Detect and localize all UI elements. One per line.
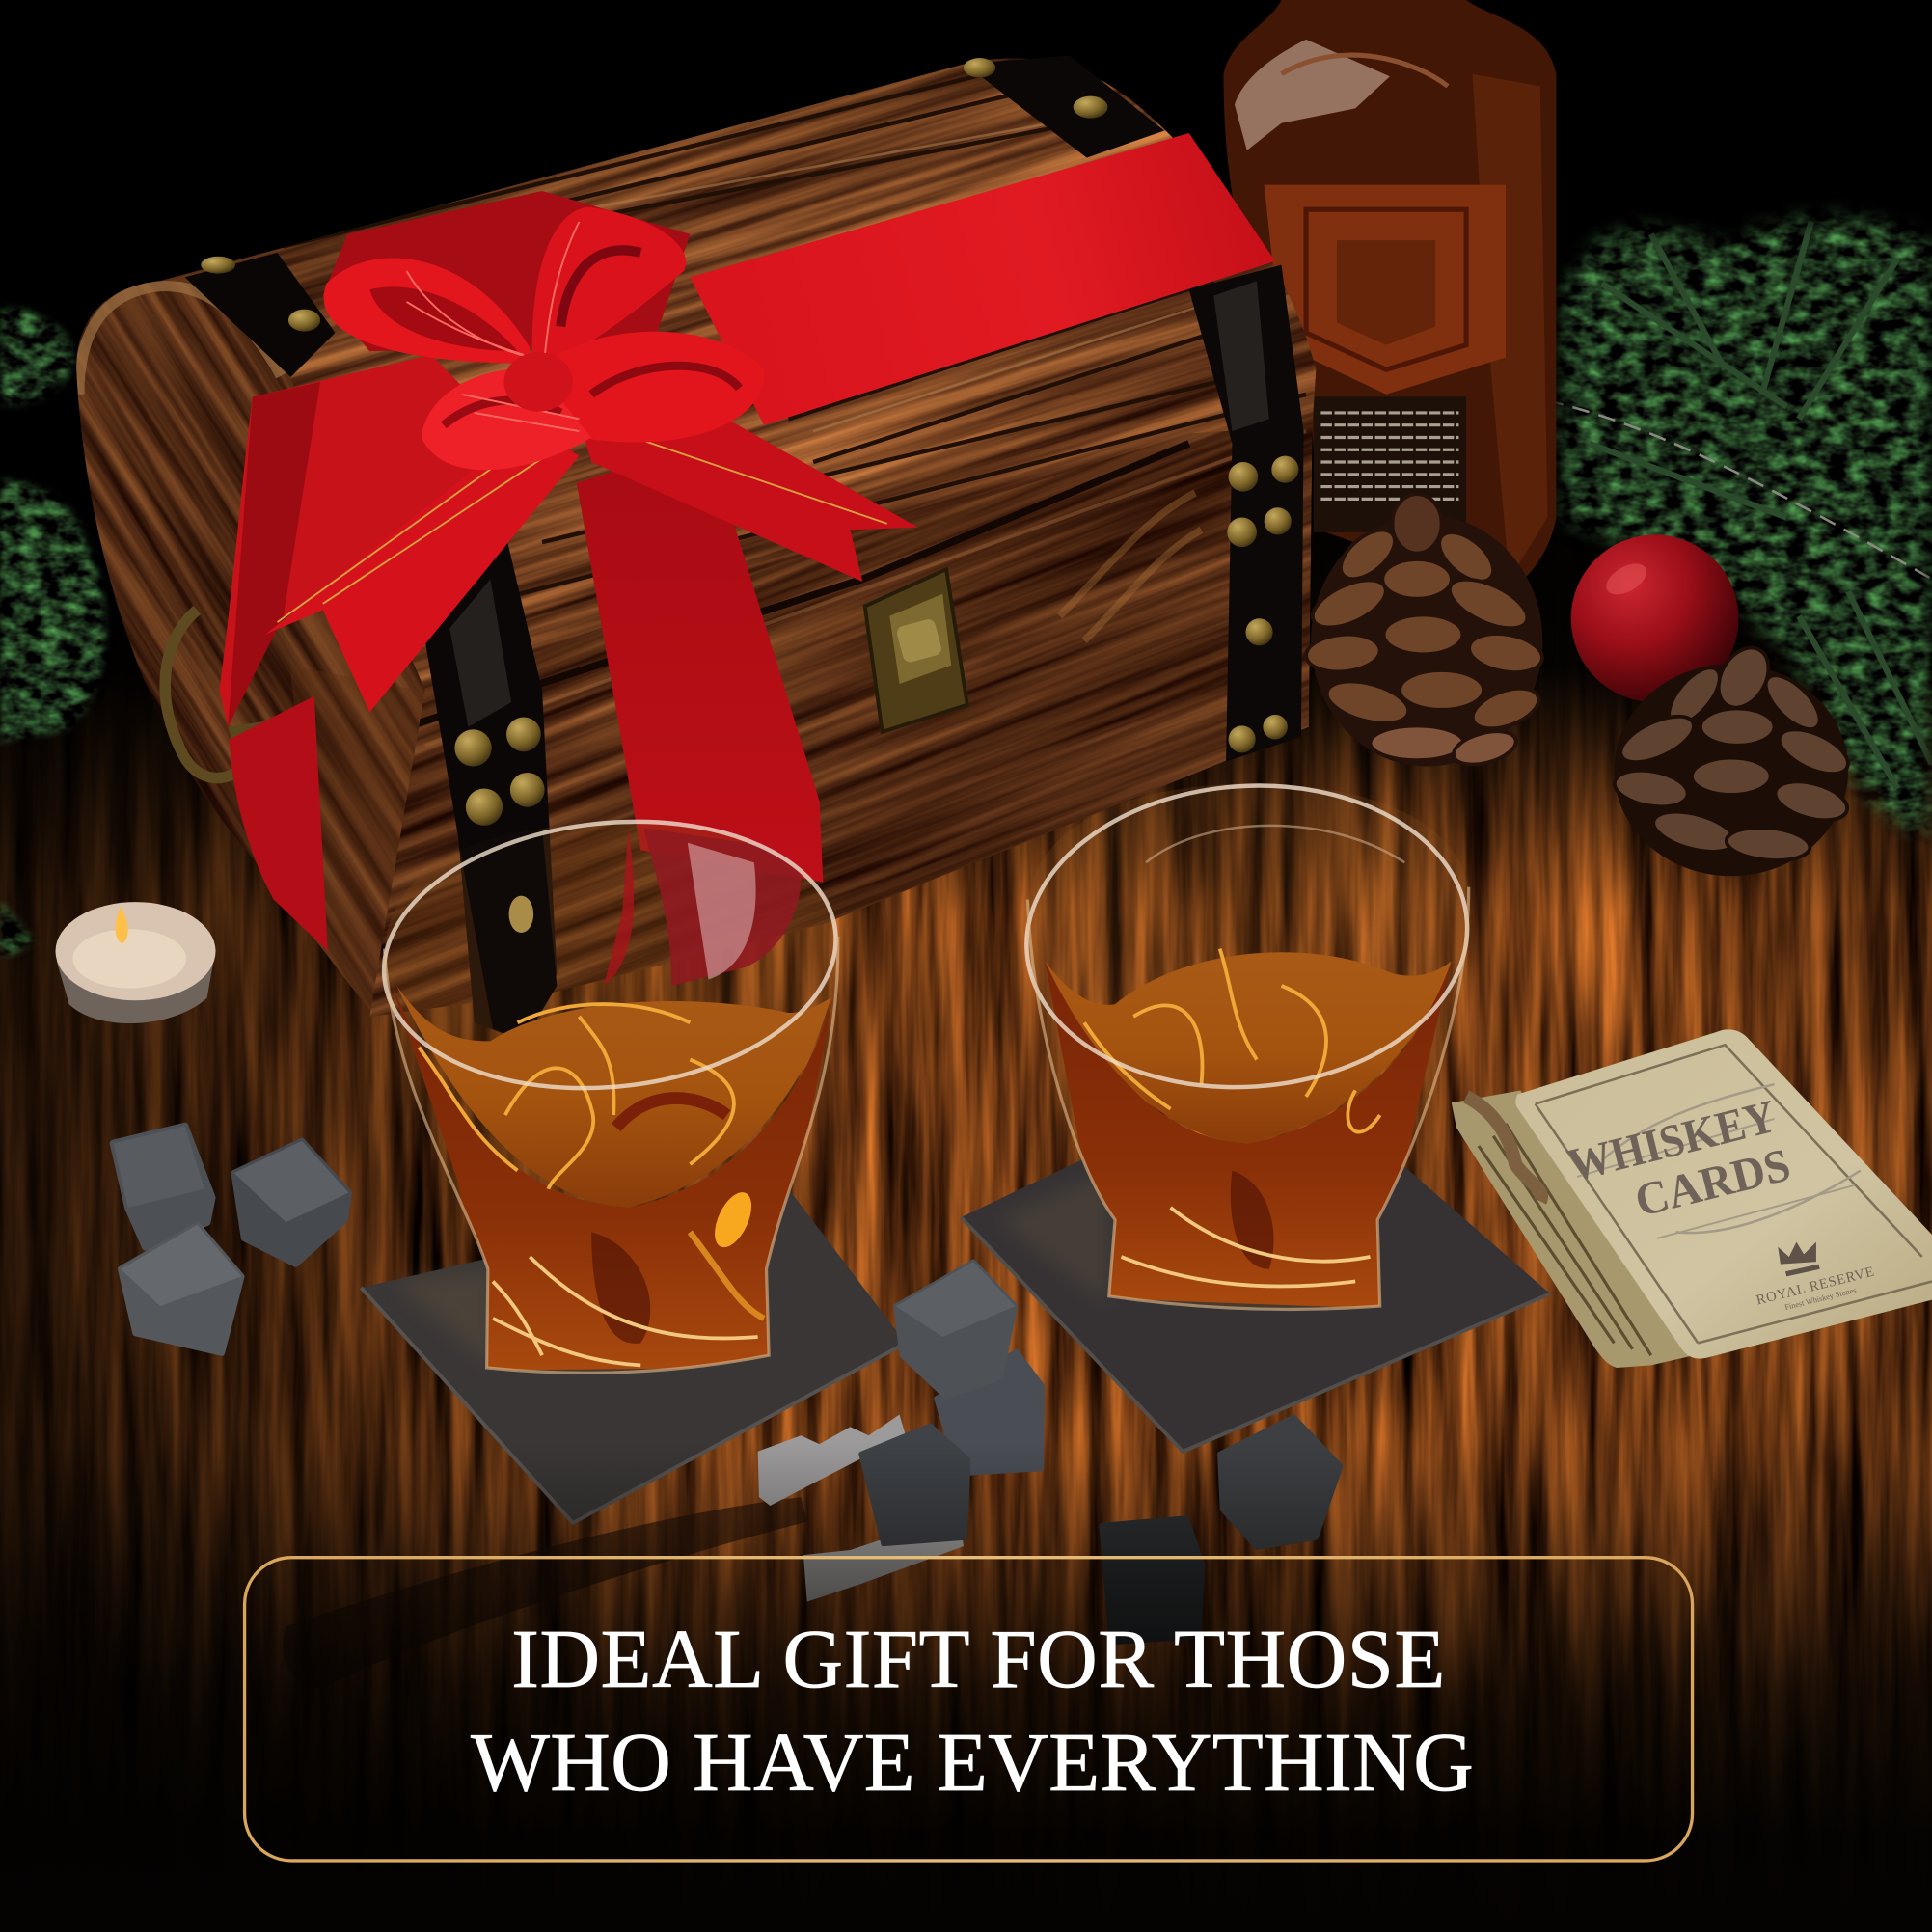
- bottle back label: [1314, 396, 1466, 532]
- twine: [1466, 1097, 1541, 1201]
- whiskey glass right: [1017, 771, 1479, 1319]
- banner headline: IDEAL GIFT FOR THOSE: [511, 1613, 1445, 1705]
- red ribbon: [219, 133, 1275, 951]
- pine branches right: [1540, 185, 1932, 850]
- candle flame: [116, 907, 128, 944]
- whiskey glass left: [382, 820, 839, 1374]
- chest front box: [370, 425, 1312, 1017]
- leather straps: [185, 55, 1304, 1041]
- brand text: Finest Whiskey Stones: [1784, 1286, 1857, 1312]
- pine cone one: [1305, 494, 1545, 771]
- wooden chest: [0, 0, 1798, 1493]
- silicone tips: [758, 1414, 906, 1506]
- banner headline: WHO HAVE EVERYTHING: [471, 1716, 1474, 1809]
- banner frame: [245, 1558, 1693, 1861]
- brass rivets: [201, 58, 1298, 826]
- tongs: [283, 1414, 964, 1688]
- pine cone two: [1612, 639, 1855, 876]
- wooden table: [0, 669, 1932, 1818]
- brand text: ROYAL RESERVE: [1755, 1265, 1876, 1308]
- brass side handle: [165, 610, 311, 778]
- whiskey stones group left: [114, 1127, 349, 1353]
- bottle label: [1265, 185, 1506, 395]
- gift bow: [265, 207, 918, 712]
- whiskey cards deck: [1452, 1029, 1932, 1368]
- chest end face: [76, 281, 424, 1011]
- bow tails: [265, 419, 918, 712]
- tealight candle: [55, 902, 216, 1023]
- card stack: [1452, 1091, 1694, 1368]
- right slate coaster: [961, 1140, 1550, 1452]
- left slate coaster: [361, 1189, 906, 1523]
- crown logo: [1778, 1242, 1820, 1276]
- banner headline: [471, 1613, 1474, 1809]
- card title: WHISKEY: [1564, 1091, 1782, 1191]
- chest lid: [160, 58, 1316, 691]
- bottom fade: [0, 1442, 1932, 1932]
- banner: [245, 1558, 1693, 1861]
- whiskey bottle: [1223, 0, 1556, 591]
- card title: CARDS: [1630, 1139, 1795, 1227]
- pine branches left: [0, 305, 110, 959]
- whiskey stones group centre: [861, 1262, 1341, 1643]
- brass latch: [865, 569, 967, 732]
- top card: [1515, 1029, 1932, 1359]
- red ornament: [1571, 534, 1738, 702]
